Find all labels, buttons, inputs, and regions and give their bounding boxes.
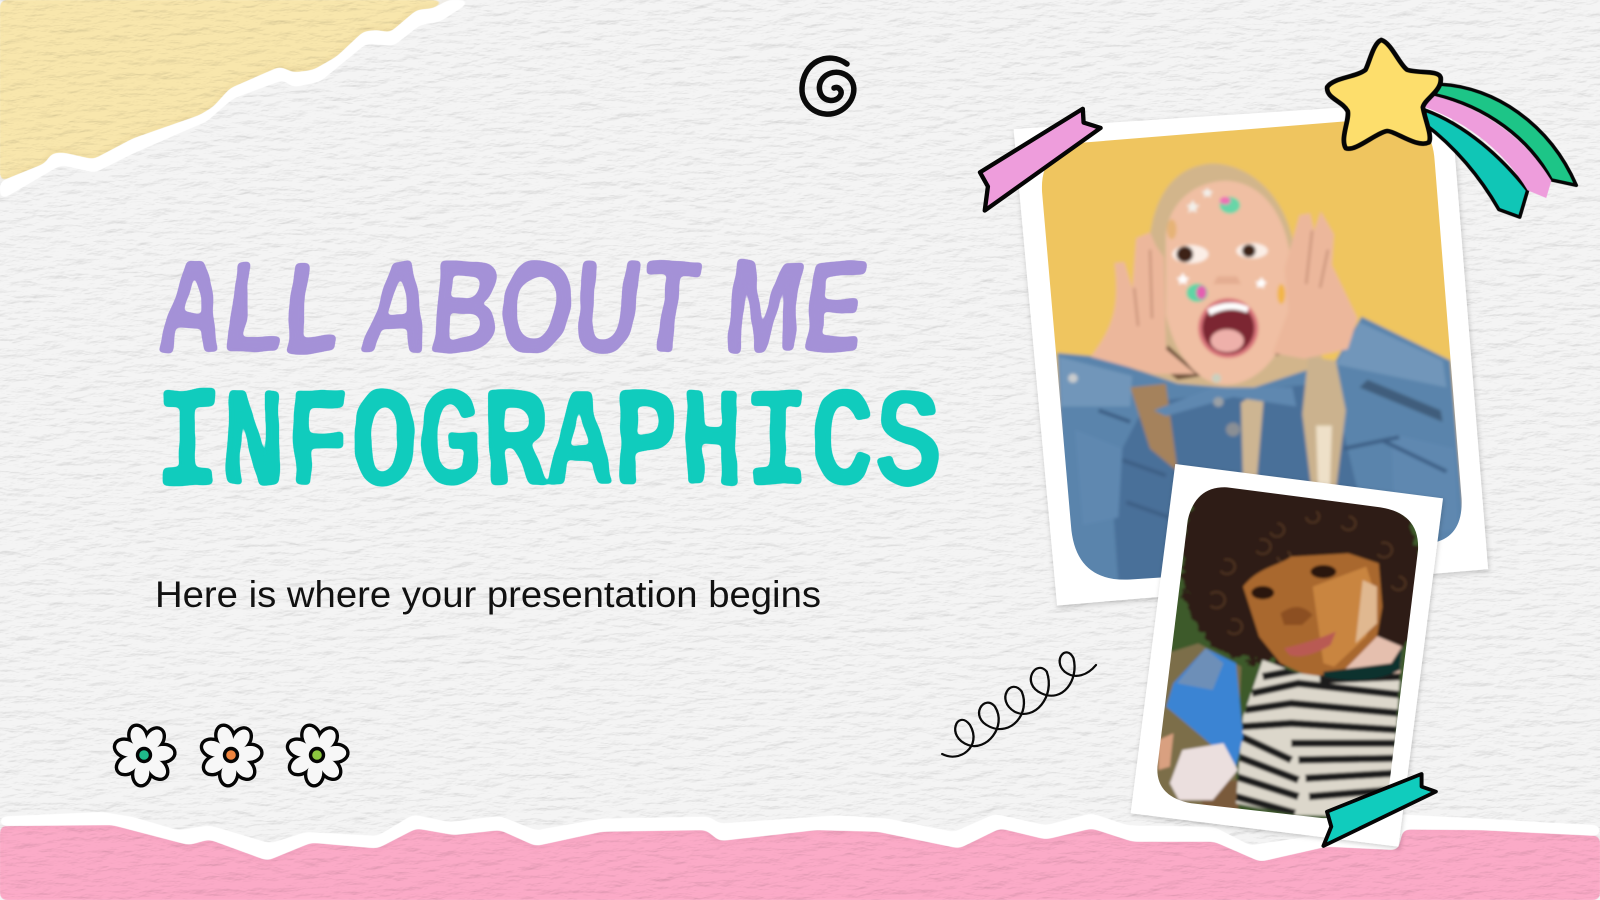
curls (1208, 511, 1406, 634)
star (1327, 40, 1441, 149)
eyes (1172, 245, 1209, 263)
subtitle: Here is where your presentation begins (155, 574, 821, 615)
long hair strands (1302, 357, 1346, 495)
white torn edge: yellow corner (0, 0, 473, 200)
striped shirt (1227, 657, 1406, 823)
title line 2: INFOGRAPHICS (155, 366, 941, 527)
torn yellow paper corner (0, 0, 448, 182)
icon: spiral doodle (802, 58, 854, 114)
blue sleeve (1166, 648, 1243, 767)
eyes (1311, 565, 1336, 578)
mouth (1198, 298, 1258, 358)
face stickers (1186, 200, 1200, 213)
neck (1323, 630, 1402, 677)
flower: lime centre (285, 723, 349, 787)
icon: curly scribble (942, 652, 1096, 757)
face (1166, 181, 1293, 385)
icons: row of three flowers (112, 723, 349, 787)
hand (1170, 743, 1238, 800)
hair (1146, 162, 1324, 390)
photo card: boy (1131, 464, 1443, 847)
photo: curly haired boy (1148, 479, 1434, 827)
flower: orange centre (199, 723, 263, 787)
white torn edge: pink strip (0, 812, 1600, 862)
ribbon: pink tape (980, 109, 1101, 211)
polaroid frame (1014, 100, 1488, 606)
polaroid frame (1131, 464, 1443, 847)
photo card: girl (1014, 97, 1494, 606)
flower: green centre (112, 723, 176, 787)
title line 1: ALL ABOUT ME (151, 233, 874, 381)
photo: girl on yellow (1042, 121, 1462, 580)
face (1243, 553, 1382, 677)
icon: shooting star with rainbow (1327, 40, 1576, 217)
rainbow tail (1425, 84, 1576, 217)
title (151, 233, 941, 527)
torn pink paper strip (0, 825, 1600, 900)
hair (1182, 479, 1422, 677)
collar and buttons (1154, 387, 1296, 416)
jacket (1057, 317, 1468, 594)
ribbon: teal tape (1323, 774, 1436, 846)
hands (1091, 232, 1195, 374)
mouth (1284, 632, 1336, 656)
